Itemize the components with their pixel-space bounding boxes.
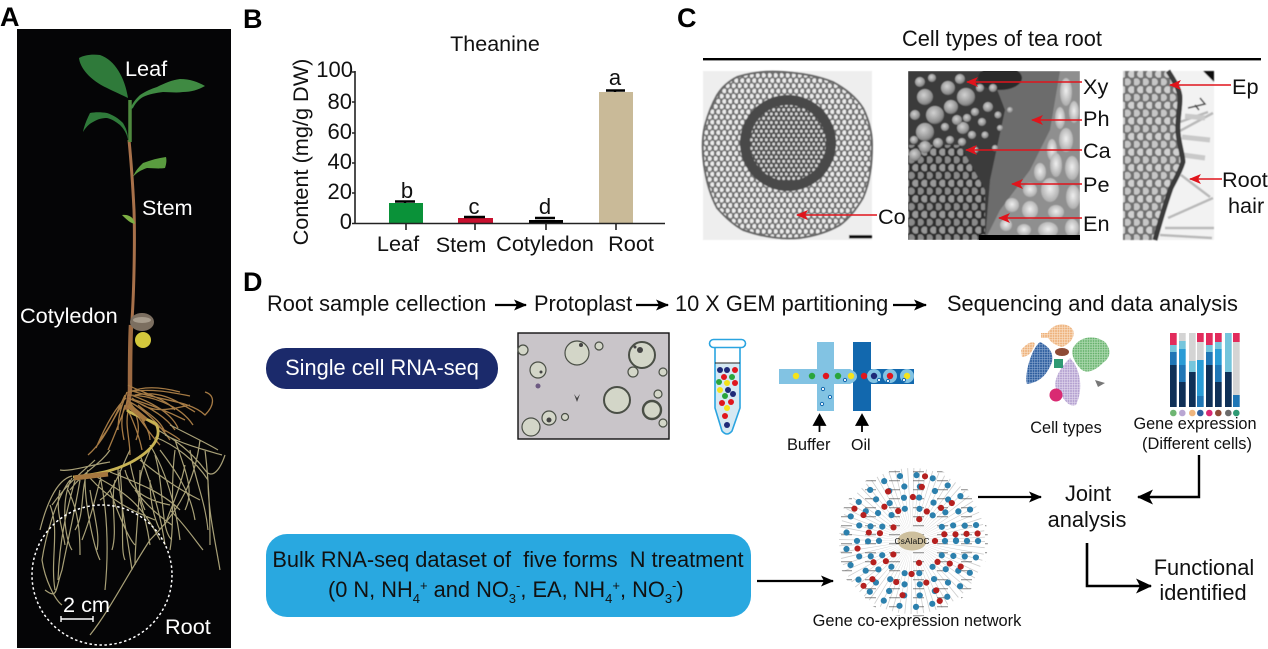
y-axis title: Content (mg/g DW)	[288, 59, 313, 245]
bar 3	[1189, 333, 1196, 407]
bar 4	[1197, 333, 1204, 407]
category labels: Stem	[436, 232, 486, 257]
label: Oil: Oil	[851, 437, 871, 454]
bar chart: theanine content	[316, 57, 665, 257]
bar 5	[1206, 333, 1213, 407]
icon: cotyledon	[130, 313, 154, 348]
divider rule	[703, 58, 1261, 60]
box: Bulk RNA-seq dataset: (0 N, NH	[328, 577, 413, 602]
red arrows and labels: cell types: Pe	[1083, 172, 1110, 197]
text: Functional identified: Functional	[1154, 555, 1254, 580]
large xylem cells	[909, 74, 1013, 161]
y-axis tick labels: 100	[316, 57, 353, 82]
significance letters: c	[468, 194, 480, 219]
box: Bulk RNA-seq dataset: )	[676, 577, 684, 602]
label: Gene expression: Gene expression	[1133, 415, 1257, 433]
label: Cell types: Cell types	[1030, 419, 1102, 437]
significance letters	[401, 65, 622, 219]
icon: lower stem and taproot	[127, 325, 131, 410]
bar: Root	[599, 92, 633, 223]
y-axis tick labels: 80	[328, 89, 352, 114]
plant label: Leaf: Leaf	[125, 56, 168, 81]
significance letters: d	[539, 194, 551, 219]
workflow arrows	[495, 304, 926, 306]
arrow: buffer inlet	[814, 415, 825, 432]
arrow: network to joint analysis	[978, 496, 1041, 498]
chart: gene co-expression network: CsAlaDC	[895, 536, 929, 546]
chart: gene co-expression network	[836, 465, 988, 617]
box: Bulk RNA-seq dataset: 4	[605, 591, 612, 606]
box: Bulk RNA-seq dataset	[266, 534, 751, 617]
bar 2	[1179, 333, 1186, 407]
bar: Leaf	[389, 203, 423, 223]
arrow: bulk data to network	[757, 580, 833, 582]
chart: stacked bars gene expression	[1170, 333, 1240, 416]
scale bar	[61, 616, 93, 622]
significance letters: a	[609, 65, 622, 90]
icon: main root	[73, 410, 158, 477]
workflow header text: Protoplast	[534, 291, 632, 316]
workflow header text	[267, 291, 1238, 316]
dashed circle around root	[32, 505, 172, 645]
bar 8	[1233, 333, 1240, 407]
arrow: joint analysis to functional identification	[1087, 543, 1151, 586]
text: Joint analysis: Joint	[1065, 481, 1111, 506]
label: Gene co-expression network: Gene co-expression network	[813, 612, 1022, 630]
text: Functional identified: identified	[1159, 580, 1247, 605]
chart title: Theanine	[450, 32, 540, 56]
icon: brown root crown	[74, 405, 146, 478]
diagram: microfluidic channels	[779, 342, 914, 411]
plant label: 2 cm: 2 cm	[63, 592, 110, 617]
box: Bulk RNA-seq dataset: -	[516, 578, 520, 593]
text: Functional identified	[1154, 555, 1254, 605]
workflow header text: Sequencing and data analysis	[947, 291, 1238, 316]
micrograph: vascular tissues	[908, 66, 1080, 240]
chart: t-SNE cell types	[1021, 324, 1109, 406]
y-axis tick labels: 20	[328, 179, 352, 204]
box: Bulk RNA-seq dataset: +	[420, 578, 428, 593]
bar: Cotyledon	[529, 220, 563, 223]
box: Bulk RNA-seq dataset: , NO	[620, 577, 665, 602]
red arrows and labels: cell types: Ep	[1232, 74, 1259, 99]
plant label: Cotyledon: Cotyledon	[20, 303, 118, 328]
box: Bulk RNA-seq dataset: and NO	[428, 577, 509, 602]
panel label A: A	[0, 2, 20, 32]
bar 1	[1170, 333, 1177, 407]
category labels: Cotyledon	[496, 231, 594, 256]
icon: upper green stem	[128, 100, 132, 142]
panel A: tea plant photograph	[17, 29, 231, 648]
panel label B: B	[243, 4, 262, 34]
significance letters: b	[401, 178, 413, 203]
box: Bulk RNA-seq dataset: 4	[413, 591, 420, 606]
micrograph: epidermis and root hair	[1123, 71, 1214, 240]
y-axis tick labels: 0	[340, 209, 352, 234]
box: Bulk RNA-seq dataset: 3	[665, 591, 672, 606]
pill: Single cell RNA-seq	[266, 348, 498, 389]
y-axis tick labels	[316, 57, 353, 234]
red arrows and labels: cell types: Co	[878, 204, 906, 229]
category labels: Root	[608, 231, 654, 256]
text: Joint analysis: analysis	[1048, 507, 1126, 532]
icon: fine lateral roots	[40, 425, 225, 635]
parenchyma oval cells	[1000, 78, 1080, 238]
plant label: Root: Root	[165, 614, 211, 639]
box: Bulk RNA-seq dataset: , EA, NH	[520, 577, 605, 602]
bar 6	[1215, 333, 1222, 407]
bar 7	[1225, 333, 1232, 407]
red arrows and labels: cell types	[797, 74, 1268, 236]
panel label D: D	[243, 267, 262, 297]
box: Bulk RNA-seq dataset: 3	[509, 591, 516, 606]
y-axis tick labels: 40	[328, 149, 352, 174]
red arrows and labels: cell types: Xy	[1083, 74, 1108, 99]
icon: upper brown root cluster	[88, 385, 212, 455]
category labels	[377, 231, 654, 257]
icon: microcentrifuge tube with beads	[710, 340, 746, 434]
photo: protoplasts	[518, 333, 669, 439]
arrow: gene expression to joint analysis	[1138, 455, 1199, 497]
box: Bulk RNA-seq dataset: Bulk RNA-seq dataset of five forms N treatment	[272, 547, 744, 572]
arrow: oil inlet	[856, 415, 868, 432]
category labels: Leaf	[377, 231, 420, 256]
icon: stem	[129, 140, 134, 320]
section title: Cell types of tea root	[902, 26, 1102, 51]
red arrows and labels: cell types: Ph	[1083, 106, 1110, 131]
micrograph: root cross section	[703, 71, 872, 240]
red arrows and labels: cell types: hair	[1228, 193, 1264, 218]
label: Buffer: Buffer	[787, 436, 831, 454]
red arrows and labels: cell types: En	[1083, 211, 1110, 236]
box: Bulk RNA-seq dataset: -	[672, 578, 676, 593]
plant label: Stem: Stem	[142, 195, 193, 220]
panel label C: C	[677, 3, 696, 33]
bar: Stem	[458, 218, 493, 223]
pill: Single cell RNA-seq: Single cell RNA-seq	[285, 355, 479, 380]
cell colour dots	[1170, 410, 1240, 416]
y-axis tick labels: 60	[328, 119, 352, 144]
text: Joint analysis	[1048, 481, 1126, 532]
workflow header text: Root sample cellection	[267, 291, 486, 316]
workflow header text: 10 X GEM partitioning	[675, 291, 888, 316]
label: Different cells: (Different cells)	[1142, 435, 1252, 453]
error bars	[395, 90, 625, 218]
box: Bulk RNA-seq dataset: +	[612, 578, 620, 593]
icon: leaves	[79, 55, 205, 224]
red arrows and labels: cell types: Root	[1222, 167, 1268, 192]
red arrows and labels: cell types: Ca	[1083, 138, 1112, 163]
axes	[352, 71, 665, 230]
